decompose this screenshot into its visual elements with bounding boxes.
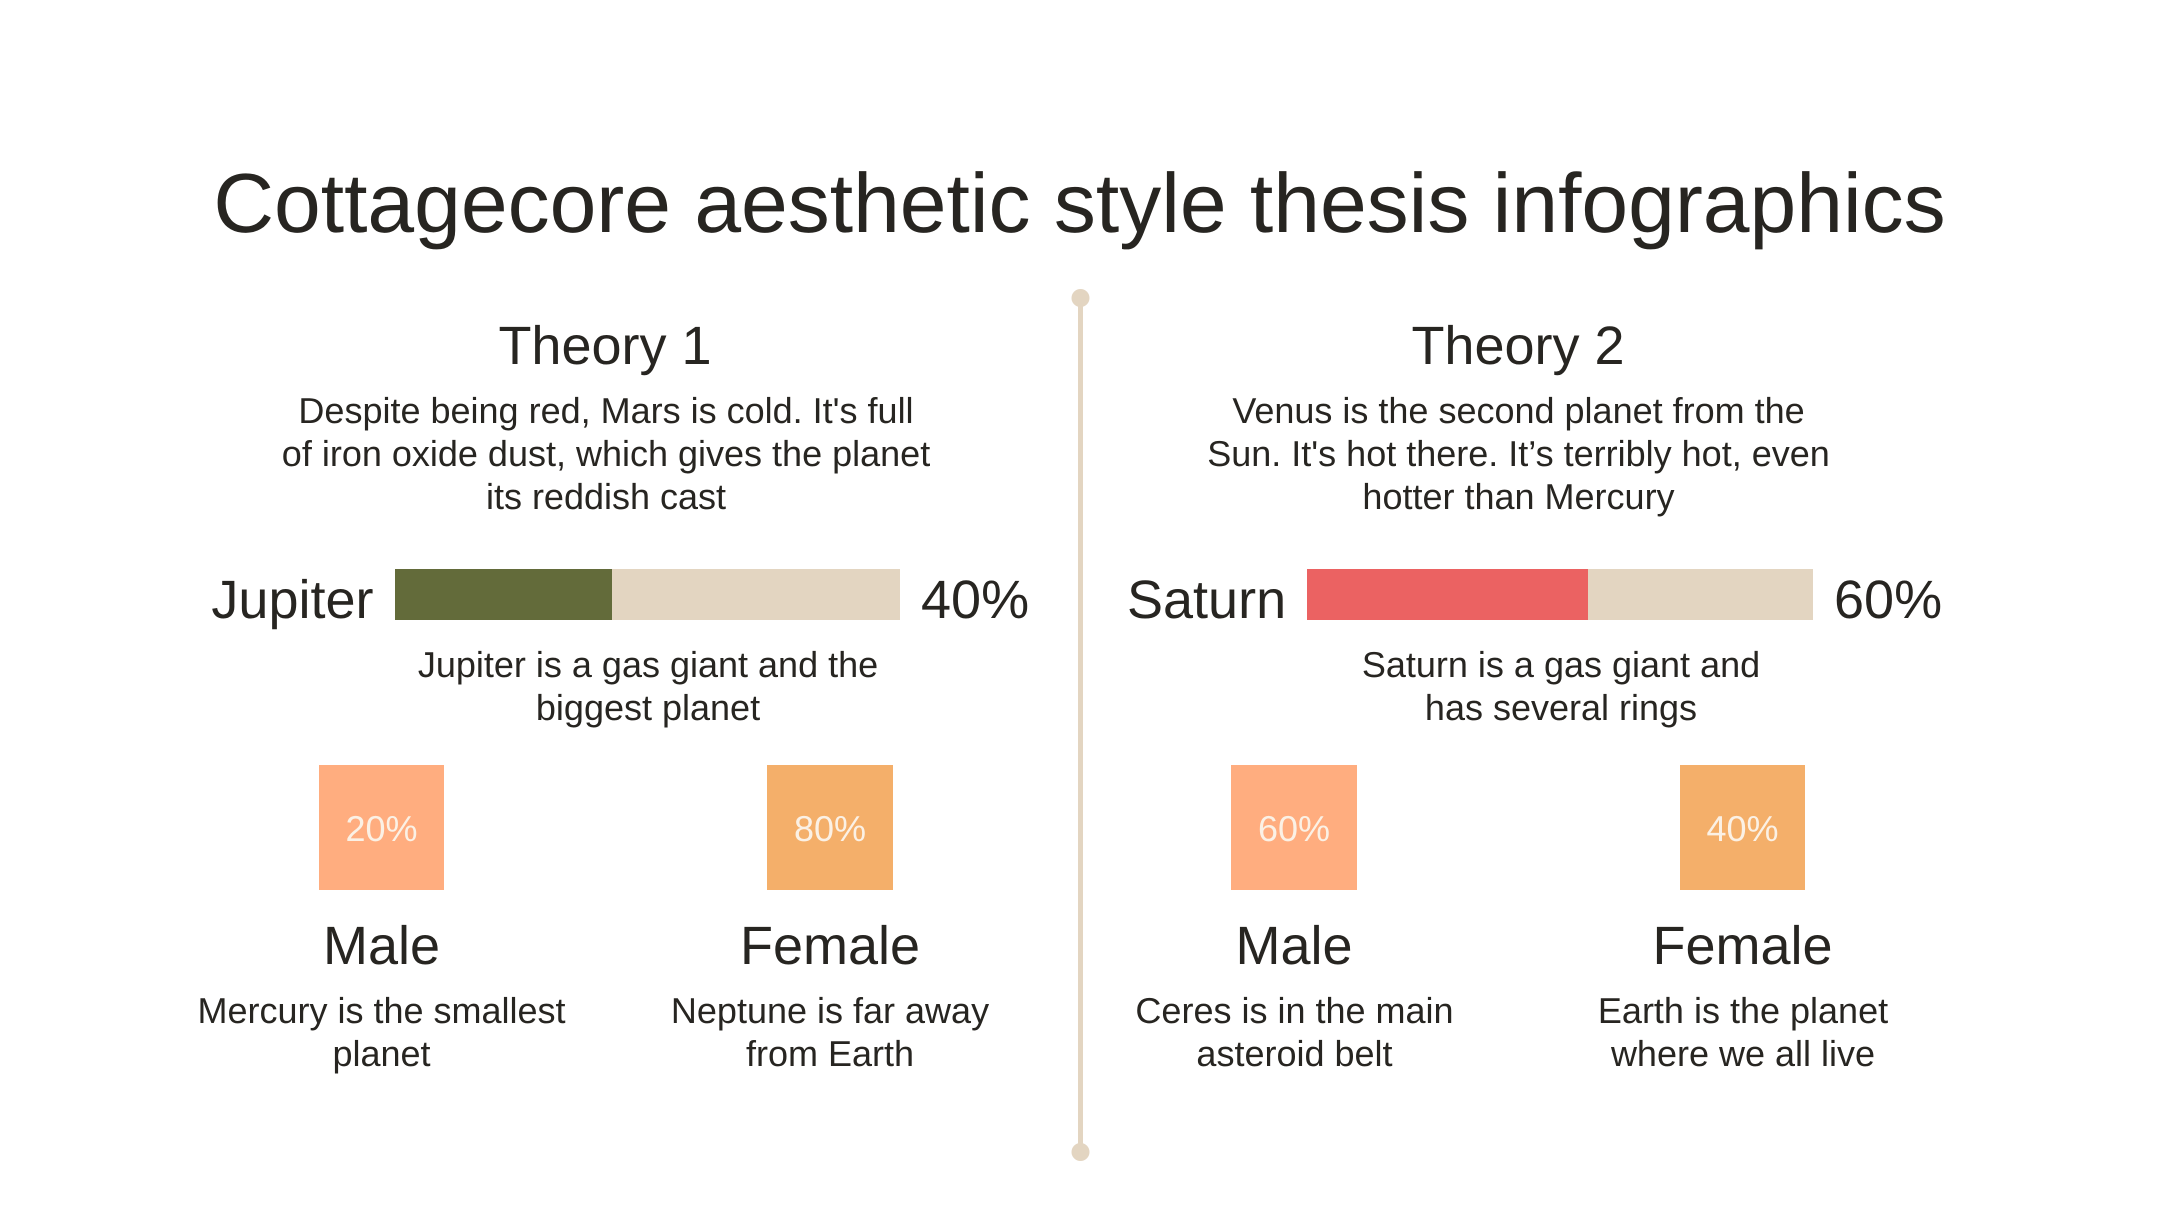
tile: female 80%: 80%: [794, 808, 866, 849]
title: Cottagecore aesthetic style thesis infographics: [213, 156, 1946, 250]
label: Saturn: Saturn: [1127, 570, 1286, 630]
text: theory 1 description: Despite being red, Mars is cold. It's full: [298, 390, 914, 430]
text: theory 1 description: [282, 390, 930, 516]
text: male description: Mercury is the smallest: [197, 990, 566, 1031]
text: male description: [197, 990, 566, 1074]
text: male description: [1135, 990, 1454, 1074]
heading: male: Male: [1235, 916, 1353, 976]
panel: theory 2: [1127, 316, 1942, 1074]
value: 40%: 40%: [921, 570, 1029, 630]
tile: male 60%: [1231, 765, 1357, 890]
label: Jupiter: Jupiter: [211, 570, 374, 630]
text: female description: from Earth: [746, 1033, 914, 1074]
text: Saturn description: has several rings: [1425, 687, 1697, 728]
text: theory 2 description: hotter than Mercury: [1362, 476, 1675, 516]
text: male description: planet: [332, 1033, 431, 1074]
heading: female: Female: [740, 916, 920, 976]
tile: male 20%: 20%: [345, 808, 418, 849]
heading: theory 2: Theory 2: [1411, 316, 1625, 376]
text: female description: Neptune is far away: [671, 990, 989, 1031]
tile: female 80%: [767, 765, 893, 890]
tile: female 40%: [1680, 765, 1805, 890]
text: female description: Earth is the planet: [1598, 990, 1888, 1031]
text: female description: [1598, 990, 1888, 1074]
text: theory 1 description: of iron oxide dust, which gives the planet: [282, 432, 930, 474]
center divider: [1072, 289, 1090, 1161]
text: theory 1 description: its reddish cast: [486, 476, 726, 516]
text: Saturn description: [1362, 644, 1760, 728]
text: Saturn description: Saturn is a gas giant and: [1362, 644, 1760, 685]
text: theory 2 description: [1207, 390, 1830, 516]
tile: male 20%: [319, 765, 444, 890]
heading: male: Male: [323, 916, 440, 976]
progress bar: Saturn 60%: [1307, 569, 1813, 620]
value: 60%: 60%: [1834, 570, 1942, 630]
text: theory 2 description: Venus is the second planet from the: [1232, 390, 1805, 430]
text: male description: Ceres is in the main: [1135, 990, 1454, 1031]
text: Jupiter description: biggest planet: [536, 687, 760, 728]
text: female description: [671, 990, 989, 1074]
text: theory 2 description: Sun. It's hot there. It’s terribly hot, even: [1207, 432, 1830, 474]
bar fill: Saturn: [1307, 569, 1588, 620]
text: male description: asteroid belt: [1196, 1033, 1393, 1074]
tile: male 60%: 60%: [1258, 808, 1330, 849]
heading: theory 1: Theory 1: [498, 316, 712, 376]
text: Jupiter description: Jupiter is a gas giant and the: [418, 644, 878, 685]
panel: theory 1: [197, 316, 1029, 1074]
progress bar: Jupiter 40%: [395, 569, 900, 620]
heading: female: Female: [1652, 916, 1833, 976]
text: female description: where we all live: [1611, 1033, 1875, 1074]
text: Jupiter description: [418, 644, 878, 728]
tile: female 40%: 40%: [1706, 808, 1779, 849]
bar fill: Jupiter: [395, 569, 612, 620]
